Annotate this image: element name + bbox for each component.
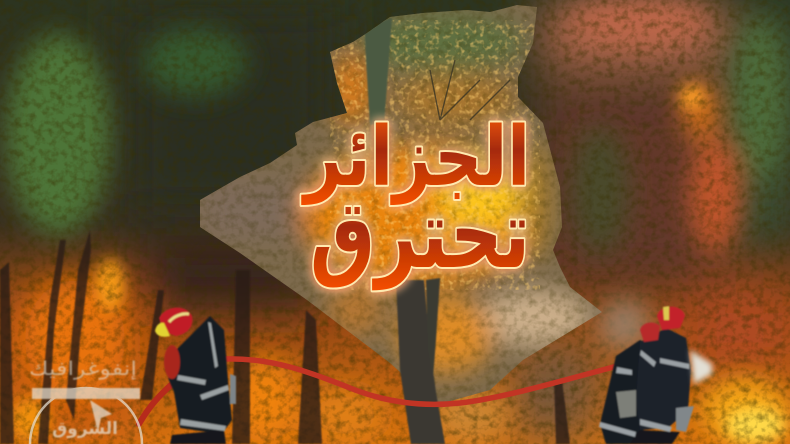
watermark bar — [32, 388, 140, 399]
title: Algeria burns — [301, 110, 530, 290]
fire hose — [139, 359, 640, 424]
helmet — [155, 308, 192, 337]
foreground trunk — [396, 278, 445, 444]
firefighter: left — [155, 308, 236, 444]
helmets — [640, 323, 660, 342]
tree in map — [364, 18, 392, 125]
water spray — [690, 350, 712, 384]
watermark arrow — [90, 400, 112, 432]
stripes — [599, 350, 689, 437]
smoke from water spray — [599, 299, 651, 351]
tree trunks — [0, 230, 570, 444]
firefighters: right — [599, 306, 694, 444]
title line 1: الجزائر — [301, 110, 530, 205]
watermark name: الشروق — [52, 419, 118, 439]
title line 2: تحترق — [310, 180, 530, 290]
watermark: logo — [29, 358, 142, 444]
map of Algeria — [190, 0, 610, 410]
reflective stripes — [177, 322, 229, 431]
watermark label: إنفوغرافيك — [29, 358, 137, 381]
watermark circle — [30, 388, 142, 444]
